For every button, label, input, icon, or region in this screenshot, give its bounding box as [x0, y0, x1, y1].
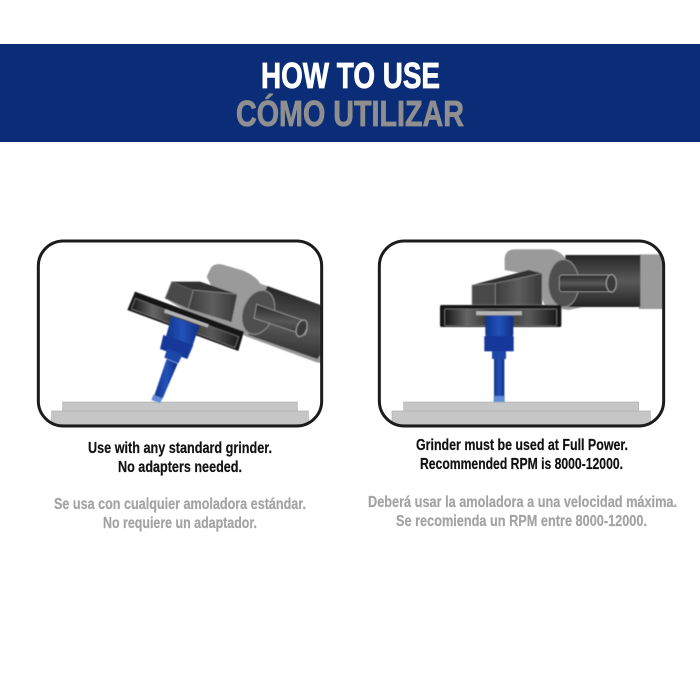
grinding bit [151, 309, 209, 403]
panel: tilted grinder [38, 241, 323, 426]
caption: left english: No adapters needed. [118, 459, 242, 476]
caption: right english [416, 437, 628, 473]
caption: right spanish [368, 494, 677, 530]
caption: left english [88, 440, 272, 476]
grinding bit [476, 311, 522, 402]
panel: level grinder [379, 241, 665, 426]
caption: left english: Use with any standard grinder. [88, 440, 272, 457]
panel border [379, 241, 664, 426]
caption: left spanish: No requiere un adaptador. [103, 515, 257, 532]
work surface [392, 402, 650, 424]
caption: left spanish [54, 496, 306, 532]
caption: right english: Grinder must be used at Full Power. [416, 437, 628, 454]
caption: left spanish: Se usa con cualquier amoladora estándar. [54, 496, 306, 513]
header banner [0, 44, 700, 142]
grinder [440, 249, 665, 327]
title: how to use: HOW TO USE [261, 55, 440, 96]
panel border [38, 241, 322, 426]
grinder [127, 264, 323, 363]
title: como utilizar: CÓMO UTILIZAR [236, 92, 464, 134]
work surface [52, 402, 308, 424]
caption: right english: Recommended RPM is 8000-12000. [420, 456, 623, 473]
